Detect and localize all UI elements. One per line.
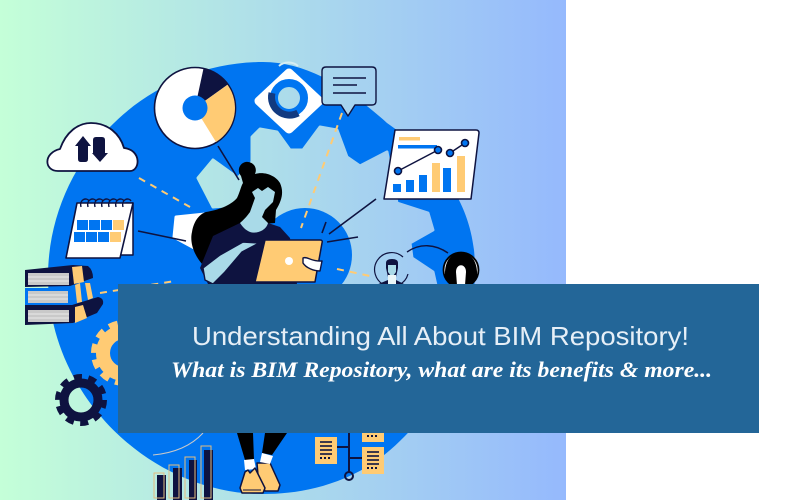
dashed connectors — [100, 113, 370, 293]
gradient panel — [0, 0, 566, 500]
right shoe — [257, 463, 280, 491]
subtitle: What is BIM Repository, what are its benefits & more... — [171, 357, 712, 382]
laptop — [255, 240, 322, 282]
inner blue hub — [258, 208, 352, 302]
icon: diamond donut card — [259, 62, 319, 129]
socks — [244, 453, 273, 470]
icon: bottom bar chart — [153, 433, 213, 500]
icon: org chart documents — [315, 433, 384, 480]
arm — [203, 242, 259, 284]
icon: calendar — [66, 199, 133, 258]
icon: stack of books — [25, 265, 103, 325]
top book — [25, 265, 93, 287]
bottom book — [25, 297, 103, 325]
banner — [118, 284, 759, 433]
blue circle backdrop — [48, 62, 475, 494]
page lines — [28, 277, 69, 318]
icon: chart card — [384, 130, 479, 199]
right avatar — [444, 252, 478, 288]
icon: yellow gear — [94, 323, 154, 383]
laptop dot — [285, 257, 293, 265]
icon: cloud with arrows — [47, 123, 138, 171]
legs — [237, 433, 287, 460]
icon: user avatars — [375, 246, 478, 288]
hair — [191, 162, 282, 264]
left avatar — [375, 253, 408, 287]
banner panel — [118, 284, 759, 433]
middle book — [25, 288, 73, 305]
light gear backdrop — [198, 127, 437, 300]
white gear tooth — [174, 214, 215, 250]
title: Understanding All About BIM Repository! — [192, 321, 689, 351]
figure: woman with laptop — [191, 162, 322, 493]
icon: navy gear — [58, 377, 104, 423]
icon: pie chart — [154, 68, 236, 148]
hand — [303, 258, 322, 271]
left shoe — [240, 468, 265, 493]
icon: speech bubble — [322, 67, 376, 116]
illustration — [25, 62, 479, 500]
torso — [200, 223, 297, 284]
connector lines — [138, 146, 376, 242]
face and neck — [240, 187, 275, 233]
